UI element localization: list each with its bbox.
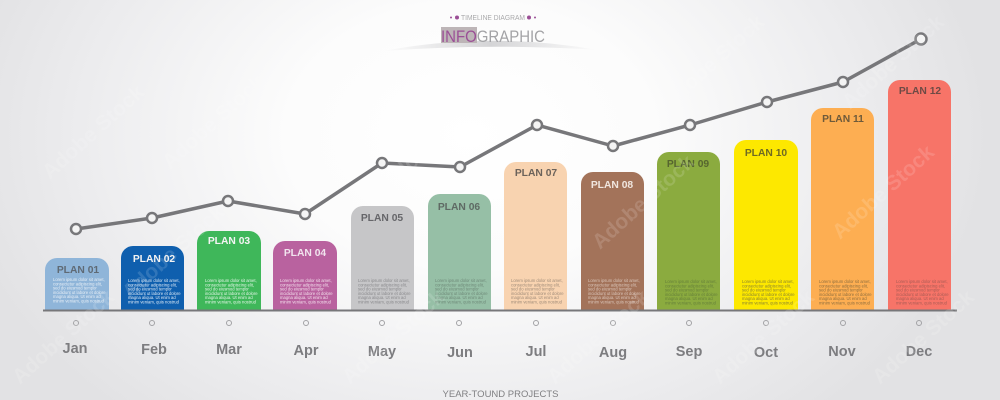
panel: plan 07: Lorem ipsum dolor sit amet, — [511, 278, 563, 283]
panel: plan 11: sed do eiusmod tempor — [819, 288, 863, 293]
panel: plan 01 — [45, 258, 109, 310]
panel: plan 04: Lorem ipsum dolor sit amet, — [280, 278, 332, 283]
panel: plan 10 — [734, 140, 798, 310]
panel: plan 07 — [504, 162, 567, 310]
panel: plan 11: incididunt ut labore et dolore — [819, 292, 872, 297]
panel: plan 09: incididunt ut labore et dolore — [665, 292, 718, 297]
watermarks: Adobe Stock — [868, 286, 979, 389]
watermarks: Adobe Stock — [588, 151, 699, 254]
panel: plan 12: minim veniam, quis nostrud — [896, 300, 948, 306]
panel: plan 02: minim veniam, quis nostrud — [128, 300, 180, 304]
panel: plan 07: incididunt ut labore et dolore — [511, 291, 564, 296]
panel: plan 10: incididunt ut labore et dolore — [742, 292, 795, 297]
panel: plan 10: minim veniam, quis nostrud — [742, 300, 794, 306]
panel: plan 03: sed do eiusmod tempor — [205, 287, 249, 292]
panel: plan 05: Lorem ipsum dolor sit amet, — [358, 278, 410, 283]
panel: plan 04: sed do eiusmod tempor — [280, 287, 324, 292]
panel: plan 03: PLAN 03 — [208, 236, 250, 247]
line chart: yearly trend — [71, 34, 926, 234]
panel: plan 04: minim veniam, quis nostrud — [280, 300, 332, 304]
panel: plan 09: PLAN 09 — [667, 159, 709, 170]
panel: plan 02: magna aliqua. Ut enim ad — [128, 295, 176, 300]
month labels: Nov — [828, 344, 856, 360]
panel: plan 07: minim veniam, quis nostrud — [511, 300, 563, 304]
watermarks: Adobe Stock — [543, 286, 654, 389]
panel: plan 08: consectetur adipiscing elit, — [588, 282, 637, 287]
panel: plan 02: consectetur adipiscing elit, — [128, 282, 177, 287]
heading: infographic: INFOGRAPHIC — [441, 27, 545, 46]
axis tick markers — [74, 320, 922, 326]
panel: plan 07: magna aliqua. Ut enim ad — [511, 295, 559, 300]
panel: plan 12: sed do eiusmod tempor — [896, 288, 940, 293]
panel: plan 02: PLAN 02 — [133, 254, 175, 265]
panel: plan 10: consectetur adipiscing elit, — [742, 283, 791, 288]
watermarks: Adobe Stock — [338, 286, 449, 389]
panel: plan 10: magna aliqua. Ut enim ad — [742, 296, 790, 301]
month labels — [62, 341, 932, 361]
panel: plan 04: incididunt ut labore et dolore — [280, 291, 333, 296]
panel: plan 11: PLAN 11 — [822, 114, 864, 125]
panel: plan 03: incididunt ut labore et dolore — [205, 291, 258, 296]
watermarks: Adobe Stock — [38, 81, 149, 184]
panel: plan 06: incididunt ut labore et dolore — [435, 291, 488, 296]
watermarks: Adobe Stock — [658, 11, 769, 114]
month labels: Jul — [526, 344, 546, 360]
panel: plan 06: sed do eiusmod tempor — [435, 287, 479, 292]
month labels: Apr — [294, 343, 319, 359]
panel: plan 01: incididunt ut labore et dolore — [53, 290, 106, 295]
month labels: Sep — [676, 344, 702, 360]
panel: plan 01: sed do eiusmod tempor — [53, 286, 97, 291]
watermarks: Adobe Stock — [828, 141, 939, 244]
panel: plan 01: magna aliqua. Ut enim ad — [53, 294, 101, 299]
panel: plan 12: Lorem ipsum dolor sit amet, — [896, 279, 948, 284]
panel: plan 10: Lorem ipsum dolor sit amet, — [742, 279, 794, 284]
footer caption: YEAR-TOUND PROJECTS — [443, 389, 558, 400]
panel: plan 09: magna aliqua. Ut enim ad — [665, 296, 713, 301]
panel: plan 09: minim veniam, quis nostrud — [665, 300, 717, 306]
bars — [45, 80, 951, 310]
panel: plan 02: sed do eiusmod tempor — [128, 287, 172, 292]
panel: plan 06: Lorem ipsum dolor sit amet, — [435, 278, 487, 283]
panel: plan 02: Lorem ipsum dolor sit amet, — [128, 278, 180, 283]
watermarks: Adobe Stock — [158, 71, 269, 174]
panel: plan 05: minim veniam, quis nostrud — [358, 300, 410, 304]
panel: plan 04: PLAN 04 — [284, 248, 326, 259]
heading: infographic — [383, 27, 598, 51]
title block — [383, 15, 598, 51]
panel: plan 03: consectetur adipiscing elit, — [205, 282, 254, 287]
panel: plan 08: magna aliqua. Ut enim ad — [588, 295, 636, 300]
panel: plan 01: minim veniam, quis nostrud — [53, 298, 105, 304]
panel: plan 10: sed do eiusmod tempor — [742, 288, 786, 293]
panel: plan 09: sed do eiusmod tempor — [665, 288, 709, 293]
panel: plan 08 — [581, 172, 644, 310]
panel: plan 03: Lorem ipsum dolor sit amet, — [205, 278, 257, 283]
panel: plan 05 — [351, 206, 414, 310]
panel: plan 09: Lorem ipsum dolor sit amet, — [665, 279, 717, 284]
panel: plan 06: PLAN 06 — [438, 202, 480, 213]
panel: plan 09 — [657, 152, 720, 310]
watermarks: Adobe Stock — [118, 201, 229, 304]
watermarks: Adobe Stock — [838, 11, 949, 114]
subtitle: timeline diagram: TIMELINE DIAGRAM — [461, 15, 525, 22]
panel: plan 05: sed do eiusmod tempor — [358, 287, 402, 292]
panel: plan 08: Lorem ipsum dolor sit amet, — [588, 278, 640, 283]
watermarks: Adobe Stock — [8, 286, 119, 389]
panel: plan 12: PLAN 12 — [899, 86, 941, 97]
panel: plan 12: incididunt ut labore et dolore — [896, 292, 949, 297]
panel: plan 11: consectetur adipiscing elit, — [819, 283, 868, 288]
panel: plan 04 — [273, 241, 337, 310]
panel: plan 07: consectetur adipiscing elit, — [511, 282, 560, 287]
panel: plan 10: PLAN 10 — [745, 148, 787, 159]
month labels: Jan — [62, 341, 88, 357]
panel: plan 04: consectetur adipiscing elit, — [280, 282, 329, 287]
panel: plan 03 — [197, 231, 261, 310]
panel: plan 05: magna aliqua. Ut enim ad — [358, 295, 406, 300]
panel: plan 01: Lorem ipsum dolor sit amet, — [53, 277, 105, 282]
watermarks: Adobe Stock — [328, 11, 439, 114]
panel: plan 06 — [428, 194, 491, 310]
month labels: Mar — [216, 342, 242, 358]
panel: plan 08: minim veniam, quis nostrud — [588, 300, 640, 304]
month labels: Oct — [754, 345, 778, 361]
watermarks: Adobe Stock — [708, 286, 819, 389]
month labels: Jun — [447, 345, 473, 361]
panel: plan 12 — [888, 80, 951, 310]
panel: plan 05: PLAN 05 — [361, 213, 403, 224]
month labels: May — [368, 344, 396, 360]
panel: plan 11: magna aliqua. Ut enim ad — [819, 296, 867, 301]
baseline axis — [43, 310, 957, 312]
panel: plan 11 — [811, 108, 874, 310]
panel: plan 07: sed do eiusmod tempor — [511, 287, 555, 292]
panel: plan 04: magna aliqua. Ut enim ad — [280, 295, 328, 300]
panel: plan 06: magna aliqua. Ut enim ad — [435, 295, 483, 300]
panel: plan 06: consectetur adipiscing elit, — [435, 282, 484, 287]
watermarks: Adobe Stock — [378, 91, 489, 194]
panel: plan 02: incididunt ut labore et dolore — [128, 291, 181, 296]
panel: plan 03: magna aliqua. Ut enim ad — [205, 295, 253, 300]
panel: plan 08: PLAN 08 — [591, 180, 633, 191]
panel: plan 12: consectetur adipiscing elit, — [896, 283, 945, 288]
panel: plan 03: minim veniam, quis nostrud — [205, 300, 257, 304]
month labels: Aug — [599, 345, 627, 361]
panel: plan 02 — [121, 246, 184, 310]
month labels: Dec — [906, 344, 932, 360]
panel: plan 07: PLAN 07 — [515, 168, 557, 179]
panel: plan 01: PLAN 01 — [57, 265, 99, 276]
panel: plan 01: consectetur adipiscing elit, — [53, 281, 102, 286]
panel: plan 09: consectetur adipiscing elit, — [665, 283, 714, 288]
panel: plan 08: incididunt ut labore et dolore — [588, 291, 641, 296]
panel: plan 11: minim veniam, quis nostrud — [819, 300, 871, 306]
month labels: Feb — [141, 342, 167, 358]
panel: plan 05: incididunt ut labore et dolore — [358, 291, 411, 296]
panel: plan 05: consectetur adipiscing elit, — [358, 282, 407, 287]
panel: plan 08: sed do eiusmod tempor — [588, 287, 632, 292]
panel: plan 11: Lorem ipsum dolor sit amet, — [819, 279, 871, 284]
panel: plan 06: minim veniam, quis nostrud — [435, 300, 487, 304]
panel: plan 12: magna aliqua. Ut enim ad — [896, 296, 944, 301]
